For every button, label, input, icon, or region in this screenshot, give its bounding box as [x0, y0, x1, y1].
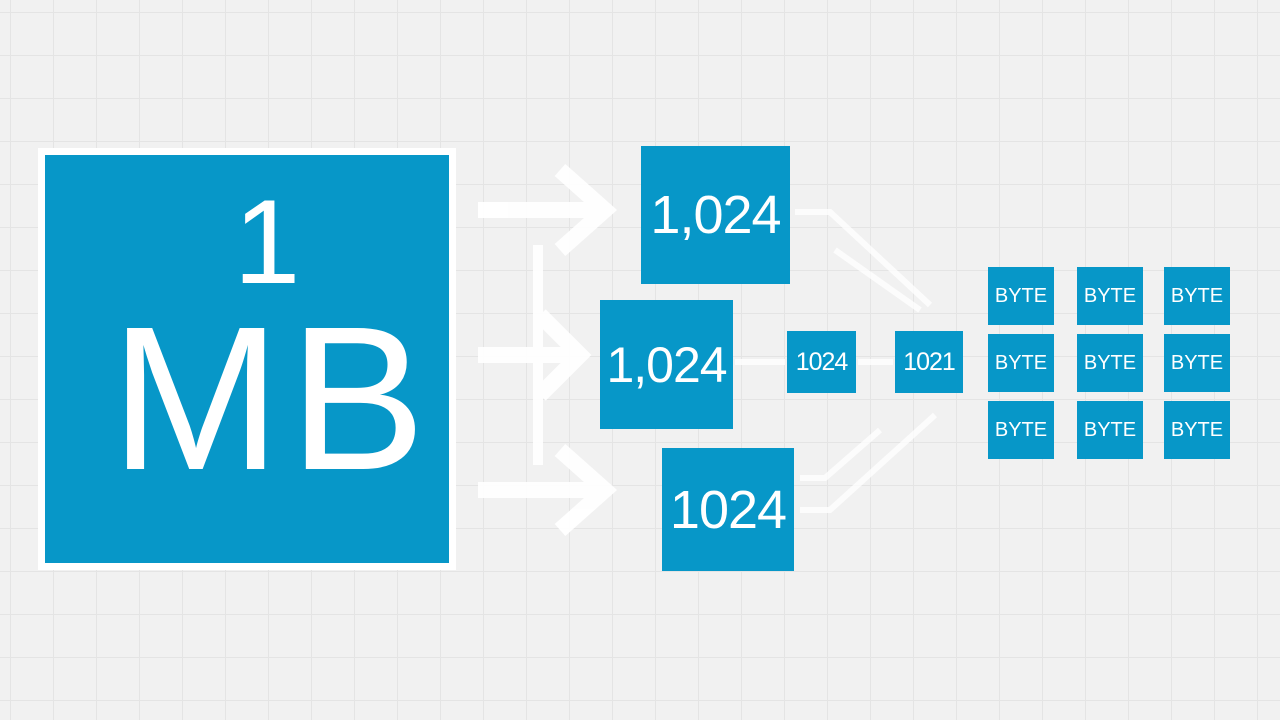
byte grid: BYTE	[1084, 418, 1136, 440]
small box 1021	[895, 331, 963, 393]
small box 1024: 1024	[796, 348, 847, 376]
box 1,024 middle	[600, 300, 733, 429]
box 1024 bottom: 1024	[670, 480, 786, 540]
byte grid: BYTE	[995, 352, 1047, 374]
byte grid: BYTE	[1084, 284, 1136, 306]
byte grid	[988, 267, 1230, 459]
MB: MB	[110, 284, 434, 513]
box 1024 bottom	[662, 448, 794, 571]
byte grid: BYTE	[1171, 418, 1223, 440]
small box 1024	[787, 331, 856, 393]
byte grid: BYTE	[995, 284, 1047, 306]
main box: 1 MB	[38, 148, 456, 570]
box 1,024 top	[641, 146, 790, 284]
byte grid: BYTE	[995, 418, 1047, 440]
small box 1021: 1021	[903, 348, 955, 376]
byte grid: BYTE	[1084, 352, 1136, 374]
box 1,024 middle: 1,024	[606, 336, 727, 392]
byte grid: BYTE	[1171, 352, 1223, 374]
box 1,024 top: 1,024	[650, 185, 781, 245]
byte grid: BYTE	[1171, 284, 1223, 306]
number 1: 1	[234, 175, 300, 309]
